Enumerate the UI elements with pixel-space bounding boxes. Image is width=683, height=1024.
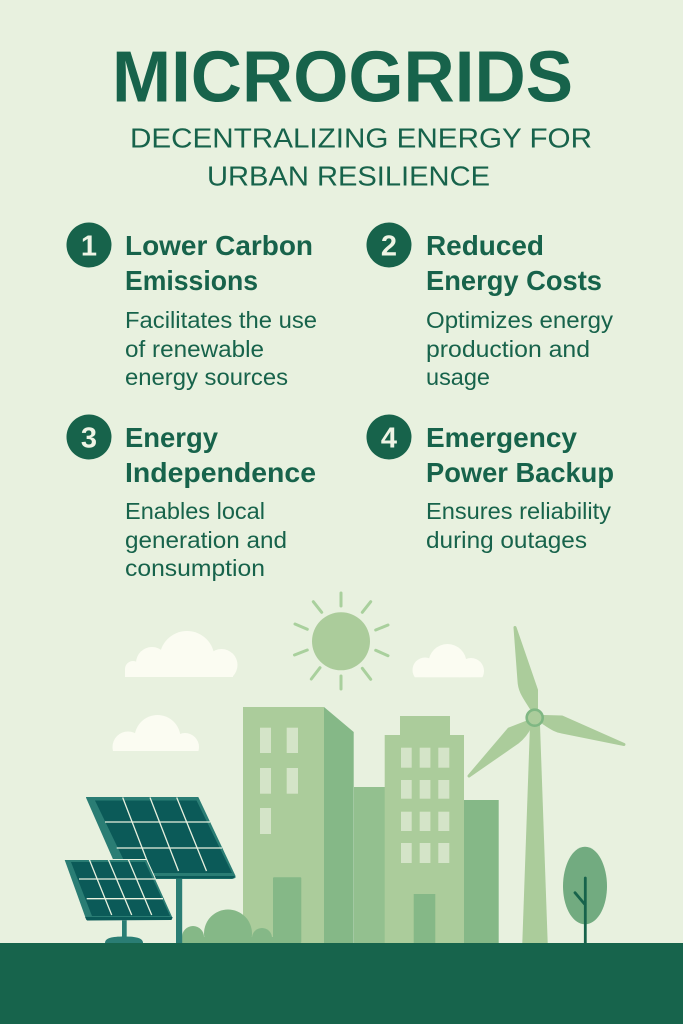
heading 4: Emergency bbox=[426, 422, 578, 453]
description 2: production and bbox=[426, 336, 590, 362]
building: tall left bbox=[243, 707, 354, 943]
description 1: energy sources bbox=[125, 364, 288, 390]
number badge 1 bbox=[66, 222, 112, 268]
description 2 bbox=[426, 307, 614, 390]
description 1: Facilitates the use bbox=[125, 307, 317, 333]
subtitle bbox=[130, 123, 592, 192]
title: MICROGRIDS bbox=[112, 36, 573, 118]
building: low right bbox=[464, 800, 499, 943]
icon: sun bbox=[294, 593, 388, 689]
description 3: Enables local bbox=[125, 498, 265, 524]
benefit 1: lower carbon emissions bbox=[66, 222, 317, 390]
wind turbine bbox=[469, 628, 624, 943]
description 4 bbox=[426, 498, 612, 553]
description 3: consumption bbox=[125, 555, 265, 581]
heading 1: Emissions bbox=[125, 265, 258, 296]
benefit 2: reduced energy costs bbox=[366, 222, 614, 390]
number badge 3 bbox=[66, 414, 112, 460]
heading 3 bbox=[125, 422, 316, 488]
description 4: during outages bbox=[426, 527, 587, 553]
number badge 2: 2 bbox=[381, 230, 397, 262]
benefit 4: emergency power backup bbox=[366, 414, 614, 553]
description 3: generation and bbox=[125, 527, 287, 553]
ground bbox=[0, 943, 683, 1024]
icon: cloud lower bbox=[112, 715, 199, 751]
building: stepped bbox=[385, 716, 464, 943]
solar panel small bbox=[64, 860, 173, 943]
heading 1: Lower Carbon bbox=[125, 230, 313, 261]
shrub bbox=[182, 910, 274, 958]
heading 4: Power Backup bbox=[426, 457, 614, 488]
description 3 bbox=[125, 498, 287, 581]
number badge 2 bbox=[366, 222, 412, 268]
description 1 bbox=[125, 307, 317, 390]
heading 2 bbox=[426, 230, 602, 296]
heading 2: Reduced bbox=[426, 230, 544, 261]
benefit 3: energy independence bbox=[66, 414, 316, 581]
description 2: usage bbox=[426, 364, 490, 390]
subtitle: DECENTRALIZING ENERGY FOR bbox=[130, 123, 592, 154]
heading 3: Independence bbox=[125, 457, 316, 488]
heading 2: Energy Costs bbox=[426, 265, 602, 296]
description 4: Ensures reliability bbox=[426, 498, 612, 524]
number badge 1: 1 bbox=[81, 230, 97, 262]
tree bbox=[563, 847, 607, 943]
subtitle: URBAN RESILIENCE bbox=[207, 160, 490, 192]
number badge 3: 3 bbox=[81, 422, 97, 454]
heading 4 bbox=[426, 422, 614, 488]
solar panel large bbox=[86, 798, 235, 943]
description 1: of renewable bbox=[125, 336, 264, 362]
heading 3: Energy bbox=[125, 422, 219, 453]
icon: cloud left bbox=[125, 631, 238, 677]
heading 1 bbox=[125, 230, 313, 296]
number badge 4: 4 bbox=[381, 422, 397, 454]
number badge 4 bbox=[366, 414, 412, 460]
description 2: Optimizes energy bbox=[426, 307, 614, 333]
building: low middle bbox=[354, 787, 385, 943]
icon: cloud right bbox=[412, 644, 484, 678]
